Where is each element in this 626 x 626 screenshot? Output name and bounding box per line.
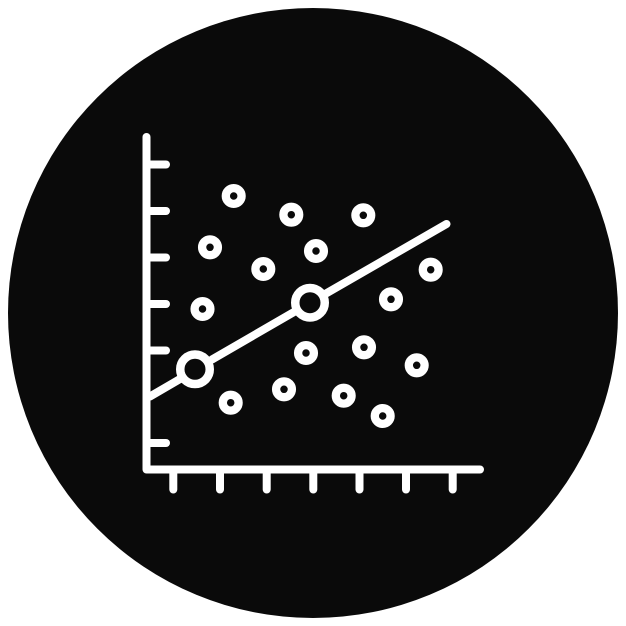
scatter data points bbox=[195, 188, 439, 424]
trend line open markers bbox=[180, 288, 325, 384]
y axis ticks bbox=[147, 164, 166, 443]
trend line bbox=[150, 224, 446, 396]
chart axes bbox=[146, 137, 480, 470]
x axis ticks bbox=[173, 470, 453, 490]
